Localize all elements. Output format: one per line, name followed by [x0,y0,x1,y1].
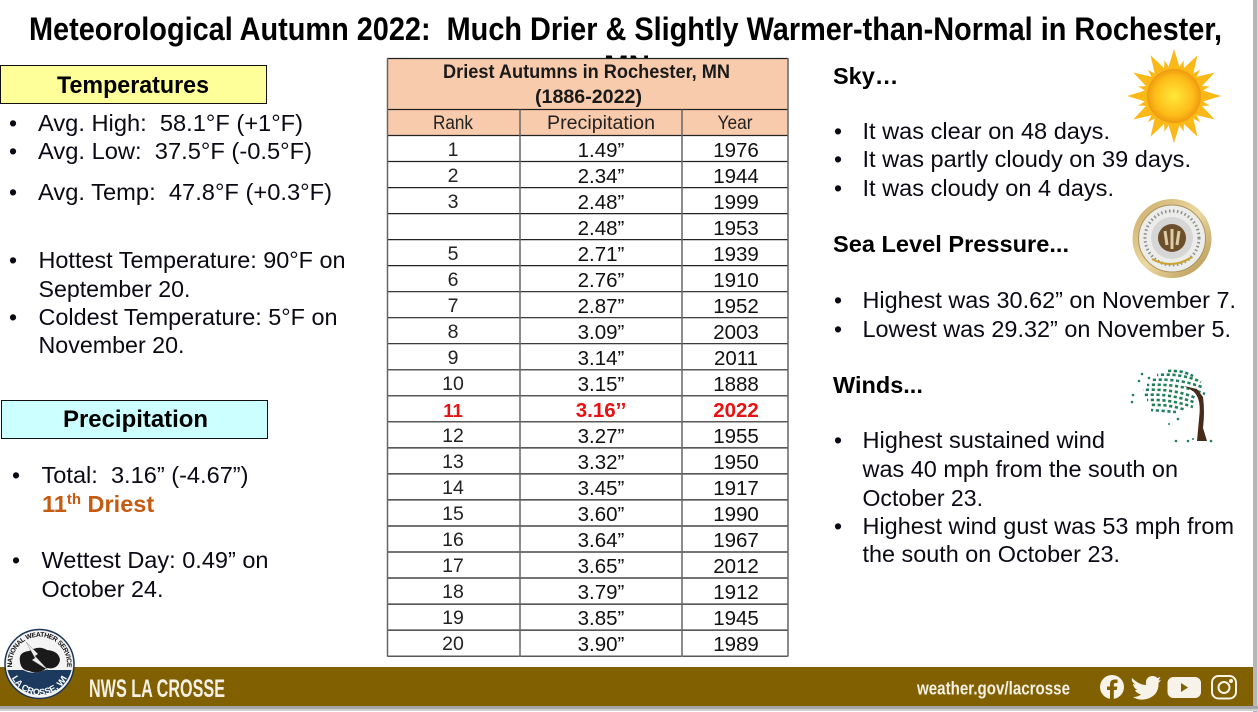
table rows: 1910 [713,269,759,292]
temperature list: Coldest Temperature: 5°F on [38,304,338,330]
icon: facebook [1100,675,1124,699]
table rows: 12 [442,425,464,447]
table rows: 6 [448,269,458,291]
table rows: 1976 [713,139,759,162]
panel: precipitation [2,400,268,602]
table header: Rank [433,112,473,134]
pressure list: Lowest was 29.32” on November 5. [862,316,1231,342]
table rows: 11 [443,400,463,421]
sky list: It was partly cloudy on 39 days. [862,146,1191,172]
precipitation list [12,462,268,602]
table header: (1886-2022) [535,87,642,108]
temperature list: • [9,179,17,205]
table rows: 16 [442,529,464,551]
winds list: • [834,513,842,539]
table header: Year [718,112,753,134]
table rows: 2022 [713,399,759,422]
temperature list: Avg. Low: 37.5°F (-0.5°F) [38,138,312,164]
table rows: 2012 [713,555,759,578]
precipitation list: Total: 3.16” (-4.67”) [42,462,248,488]
panel: winds [833,371,1234,567]
logo: national weather service la crosse: NATIONAL WEATHER SERVICE [7,632,72,668]
footer bar [0,628,1253,706]
table: driest autumns [387,58,788,656]
panel: sea level pressure [833,199,1236,342]
table rows: 2011 [714,347,758,370]
footer label: NWS LA CROSSE [89,675,225,703]
pressure list [834,287,1236,342]
table rows: 10 [442,373,464,395]
icon: twitter [1132,676,1161,700]
table rows: 3.15” [578,373,625,396]
panel: sky [833,49,1221,201]
table rows: 9 [448,347,458,369]
table rows: 2003 [713,321,759,344]
table rows: 1950 [713,451,759,474]
heading: temperatures: Temperatures [57,72,209,99]
table rows: 1912 [713,581,759,604]
table rows: 1967 [713,529,759,552]
winds list: • [834,427,842,453]
icon: windblown tree [1131,371,1212,442]
table rows: 19 [442,607,464,629]
table rows: 1888 [713,373,759,396]
sky list: It was clear on 48 days. [862,118,1110,144]
heading: temperatures [0,66,266,104]
table rows: 2.48” [578,191,625,214]
temperature list: Hottest Temperature: 90°F on [38,247,346,273]
panel: temperatures [0,66,346,358]
table rows: 14 [442,477,464,499]
footer url: weather.gov/lacrosse [916,678,1070,698]
table rows: 1917 [713,477,759,500]
pressure list: • [834,316,842,342]
table rows: 3.32” [578,451,625,474]
table rows: 1953 [713,217,759,240]
table rows: 1999 [713,191,759,214]
heading: winds: Winds... [833,372,923,398]
table rows: 3.16’’ [576,399,626,422]
table rows: 3.14” [578,347,625,370]
temperature list: • [9,110,17,136]
precipitation list: Wettest Day: 0.49” on [42,547,268,573]
temperature list: • [9,304,17,330]
table rows: 8 [448,321,458,343]
table rows: 3.64” [578,529,625,552]
sky list: • [834,146,842,172]
icon: barometer [1132,199,1212,278]
sky list: It was cloudy on 4 days. [862,175,1114,201]
table header: Driest Autumns in Rochester, MN [443,62,730,83]
table rows: 2.76” [578,269,625,292]
table rows: 1.49” [578,139,625,162]
winds list: was 40 mph from the south on [861,456,1178,482]
table rows: 7 [448,295,458,317]
table rows: 1944 [713,165,759,188]
table rows: 3.27” [578,425,625,448]
icon: youtube [1168,677,1201,698]
table rows: 17 [442,555,464,577]
sky list: • [834,118,842,144]
table rows: 1990 [713,503,759,526]
table rows: 3.09” [578,321,625,344]
winds list: Highest wind gust was 53 mph from [862,513,1234,539]
logo: national weather service la crosse: LA CROSSE, WI [12,675,67,695]
winds list: Highest sustained wind [862,427,1105,453]
sky list: • [834,175,842,201]
table rows: 15 [442,503,464,525]
icon: instagram [1212,676,1236,698]
table rows: 2.34” [578,165,625,188]
table rows: 2.87” [578,295,625,318]
table grid [387,58,788,656]
precipitation list: th [67,491,81,508]
precipitation list: Driest [81,491,154,517]
winds list [834,427,1234,567]
title: MN [604,49,650,85]
table rows: 3.79” [578,581,625,604]
temperature list: • [9,247,17,273]
heading: precipitation [2,400,268,438]
precipitation list: • [12,462,20,488]
table rows: 3.90” [578,633,625,656]
temperature list: Avg. High: 58.1°F (+1°F) [38,110,303,136]
heading: sea level pressure: Sea Level Pressure... [833,231,1069,257]
table rows: 3 [448,191,458,213]
precipitation list: 11 [42,491,67,517]
table rows: 20 [442,633,464,655]
table rows [442,139,759,656]
temperature list [9,110,346,358]
table rows: 3.45” [578,477,625,500]
table rows: 3.65” [578,555,625,578]
table rows: 1 [448,139,458,161]
precipitation list: October 24. [42,576,164,602]
table header: Precipitation [547,112,655,134]
table rows: 2.48” [578,217,625,240]
table rows: 18 [442,581,464,603]
logo: national weather service la crosse [4,628,75,700]
table rows: 1989 [713,633,759,656]
pressure list: Highest was 30.62” on November 7. [862,287,1236,313]
winds list: October 23. [862,485,983,511]
table rows: 2.71” [578,243,625,266]
table rows: 13 [442,451,464,473]
pressure list: • [834,287,842,313]
heading: precipitation: Precipitation [63,406,208,433]
temperature list: September 20. [38,276,190,302]
table rows: 1939 [713,243,759,266]
title [29,11,1222,85]
table rows: 1945 [713,607,759,630]
heading: sky: Sky… [833,63,898,89]
sky list [834,118,1191,201]
temperature list: November 20. [38,332,184,358]
temperature list: Avg. Temp: 47.8°F (+0.3°F) [38,179,332,205]
table rows: 1952 [713,295,759,318]
table rows: 3.60” [578,503,625,526]
icon: sun [1127,49,1221,143]
precipitation list: • [12,547,20,573]
table rows: 2 [448,165,458,187]
temperature list: • [9,138,17,164]
table rows: 5 [448,243,459,265]
winds list: the south on October 23. [862,541,1120,567]
table header [387,58,788,136]
table rows: 1955 [713,425,759,448]
table rows: 3.85” [578,607,625,630]
